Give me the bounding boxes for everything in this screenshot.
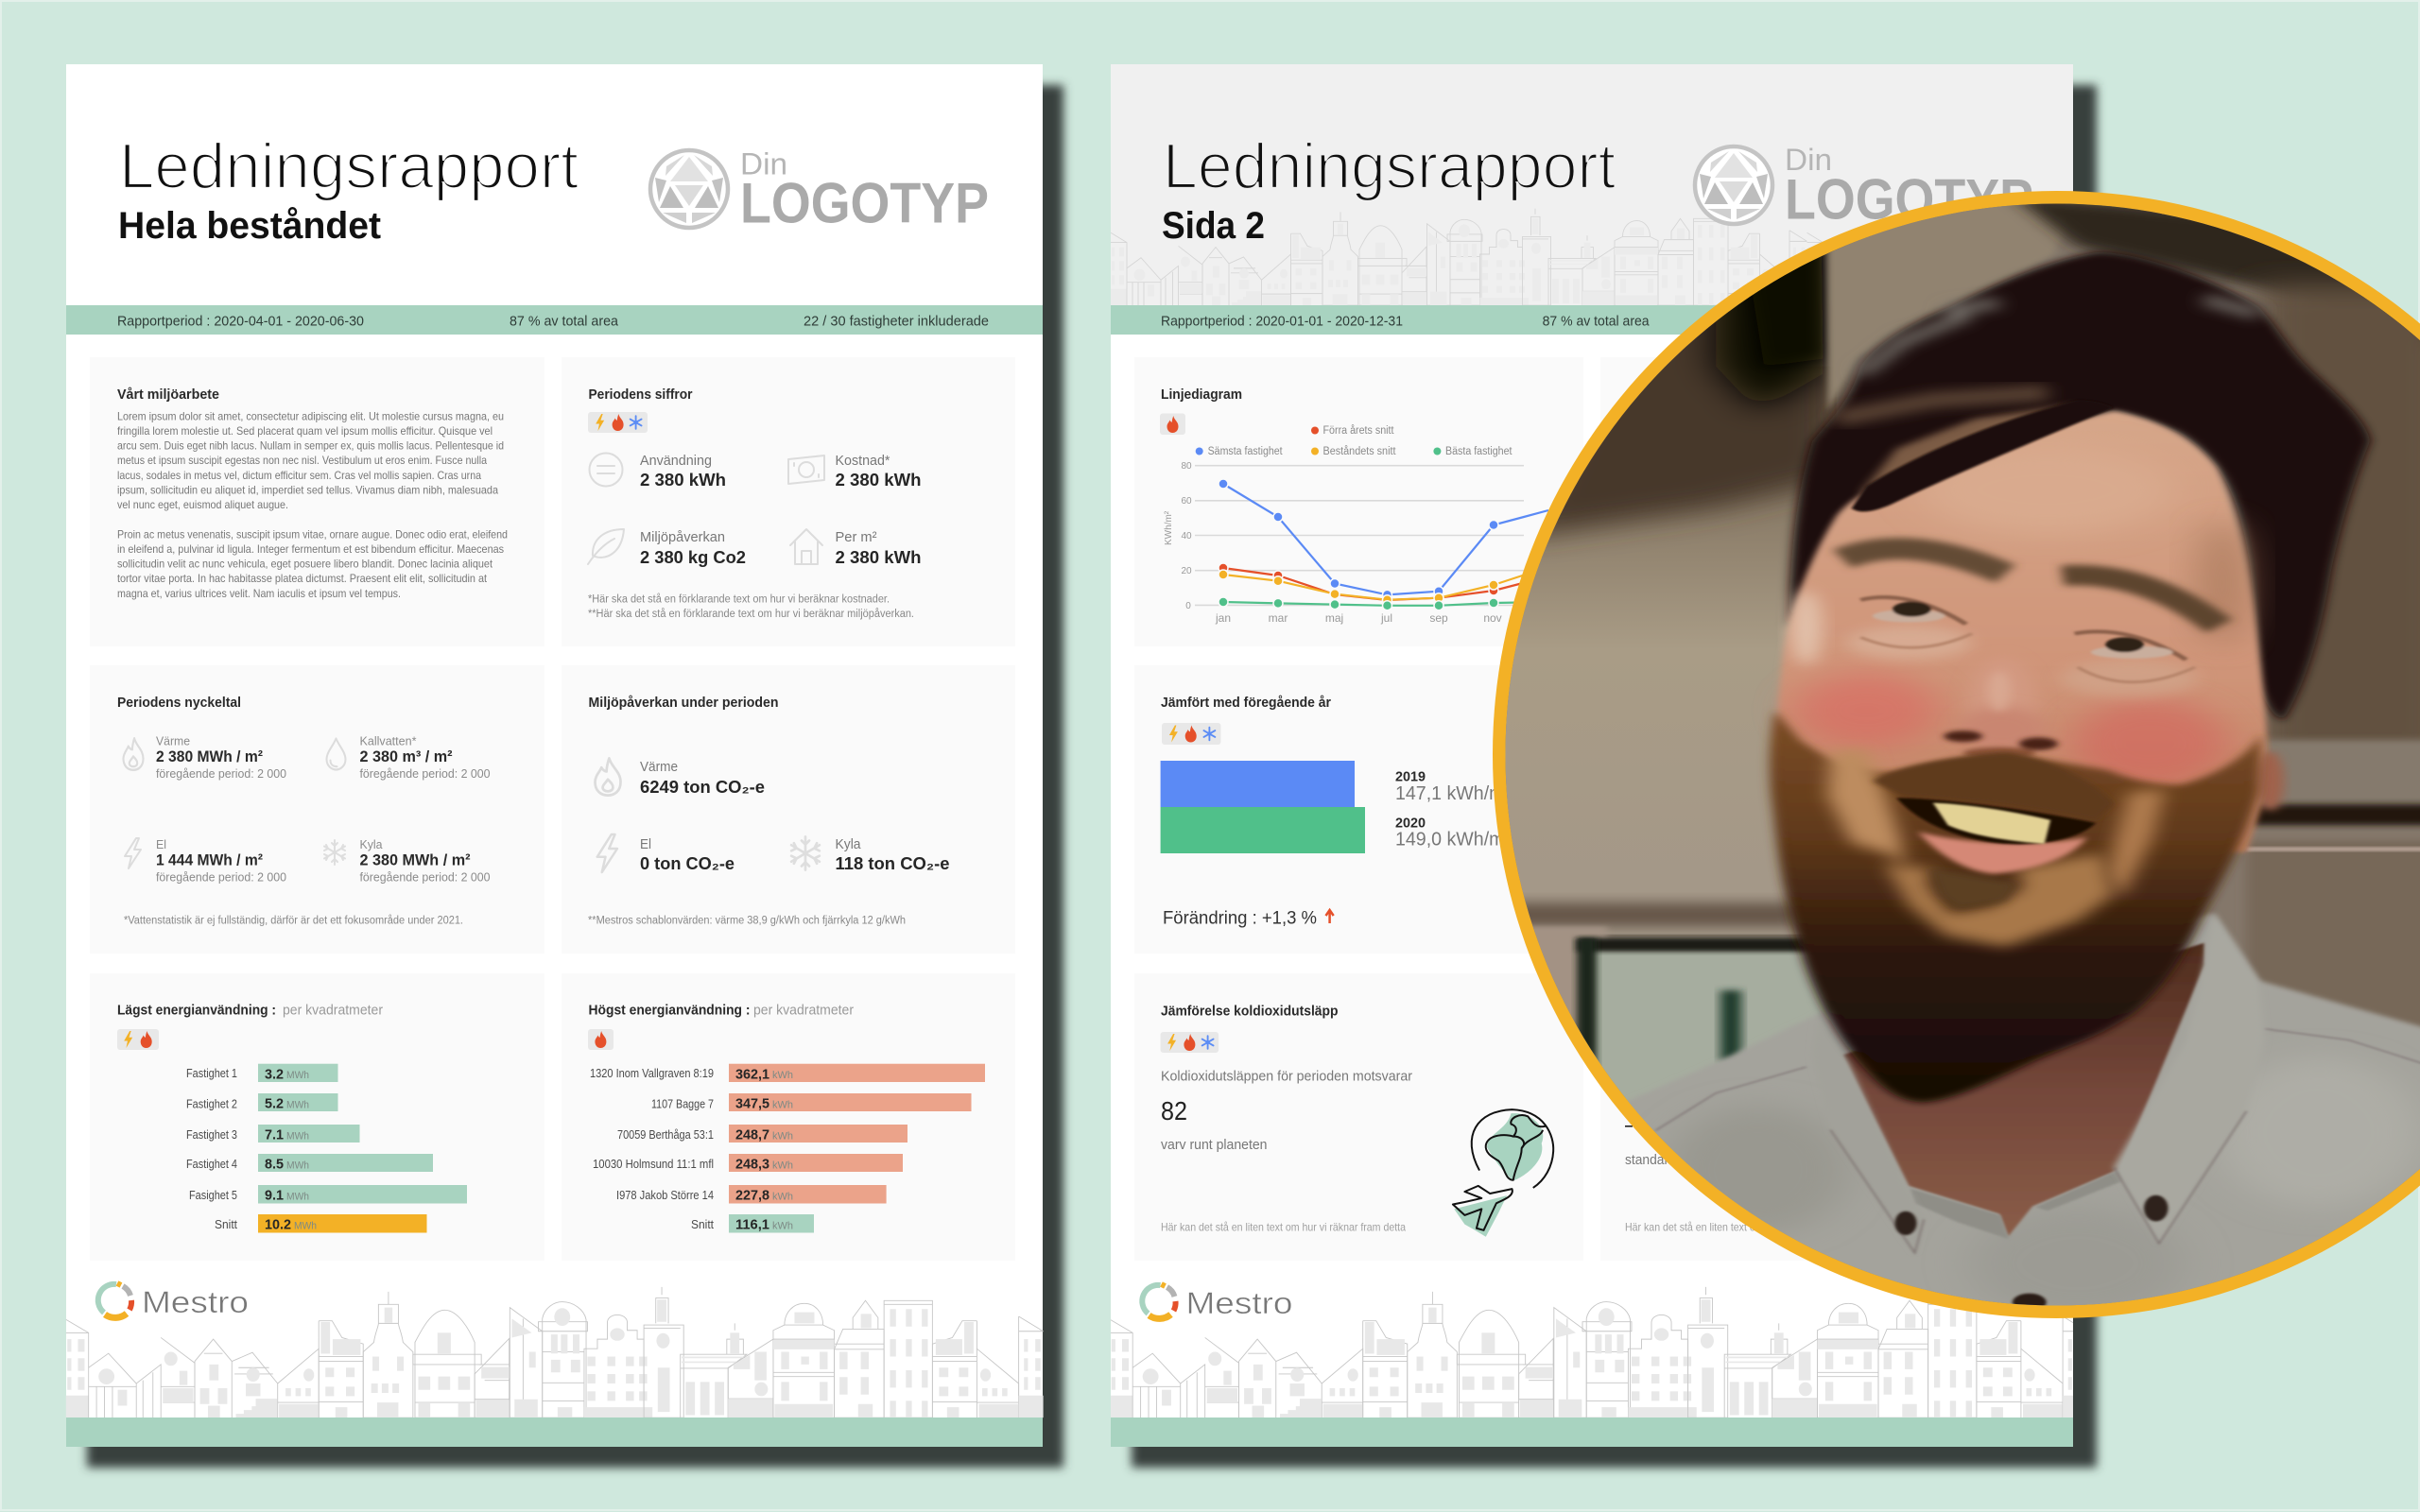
heading: Miljöpåverkan under perioden <box>588 696 779 711</box>
panel: Jämförelse koldioxidutsläpp <box>1134 973 2051 1261</box>
backdrop <box>1505 204 2420 1306</box>
Mestro logo: Mestro <box>1185 1286 1293 1320</box>
hidden panel text <box>1625 1125 1870 1234</box>
footnote: *Vattenstatistik är ej fullständig, därför är det ett fokusområde under 2021. <box>124 915 463 926</box>
line chart: 0 <box>1185 601 1191 611</box>
bar chart: lowest use: Fastighet 1 <box>186 1067 237 1080</box>
bar chart: highest use: kWh <box>772 1191 793 1202</box>
energy type chip <box>1160 414 1185 435</box>
metric: Kostnad: Kostnad* <box>836 453 890 469</box>
logo placeholder: LOGOTYP <box>1785 168 2033 231</box>
bar chart: lowest use: MWh <box>286 1070 309 1081</box>
metric: Kyla: Kyla <box>836 836 861 852</box>
chart legend: Förra årets snitt <box>1323 425 1394 437</box>
heading: Periodens nyckeltal <box>117 696 241 711</box>
panel: Periodens nyckeltal <box>90 665 544 954</box>
metric: Miljöpåverkan <box>588 529 746 567</box>
big number: 82 <box>1161 1096 1187 1125</box>
bar chart: lowest use: Fastighet 3 <box>186 1128 237 1142</box>
metric: El: El <box>640 836 651 852</box>
chart legend: Beståndets snitt <box>1323 446 1396 457</box>
bar chart: lowest use: MWh <box>286 1130 309 1142</box>
bar chart: lowest use: Fastighet 4 <box>186 1158 237 1171</box>
heading <box>117 1004 383 1019</box>
footnotes: *Här ska det stå en förklarande text om hur vi beräknar kostnader. <box>588 593 890 605</box>
bar chart: highest use: 227,8 <box>735 1187 769 1204</box>
hidden panel text: standardhus <box>1625 1152 1697 1168</box>
body text: in eleifend a, pulvinar id ligula. Integer fermentum et est bibendum efficitur. Maecenas <box>117 542 504 556</box>
metric: Värme: Värme <box>640 759 678 775</box>
energy type chip <box>588 412 648 433</box>
ear <box>2257 751 2284 811</box>
panel: Linjediagram <box>1134 357 2051 646</box>
chart legend <box>1196 425 1512 457</box>
metric: Kallvatten <box>327 734 490 781</box>
bar chart: lowest use: MWh <box>286 1191 309 1202</box>
body text: magna et, varius ultrices velit. Nam iaculis et ipsum vel tempus. <box>117 587 401 600</box>
bar chart: lowest use: Fasighet 5 <box>189 1189 237 1202</box>
info strip: 87 % av total area <box>510 314 619 329</box>
metric: Värme: Värme <box>156 734 190 748</box>
metric: Värme <box>123 734 286 781</box>
subtitle: Hela beståndet <box>118 205 381 247</box>
bar chart: highest use: 10030 Holmsund 11:1 mfl <box>593 1158 714 1171</box>
metric: Värme <box>596 758 765 797</box>
info strip <box>66 305 1043 335</box>
line chart: 60 <box>1181 496 1192 507</box>
metric: Användning <box>590 453 726 490</box>
bar chart: lowest use: 5.2 <box>265 1096 284 1111</box>
line chart: jul <box>1380 611 1392 625</box>
bar chart: highest use: 248,3 <box>735 1157 769 1172</box>
info strip: Rapportperiod : 2020-04-01 - 2020-06-30 <box>117 314 364 329</box>
comparison bars: 147,1 kWh/m² <box>1395 783 1511 804</box>
heading: Jämförelse koldioxidutsläpp <box>1161 1005 1339 1020</box>
logo placeholder: LOGOTYP <box>740 172 989 234</box>
metric: Kyla: 118 ton CO₂-e <box>836 853 949 873</box>
comparison bars: 2020 <box>1395 816 1426 832</box>
wall band and window <box>1499 902 1800 927</box>
metric: Miljöpåverkan: 2 380 kg Co2 <box>640 547 746 567</box>
line chart: mar <box>1269 611 1288 625</box>
info strip: Rapportperiod : 2020-01-01 - 2020-12-31 <box>1161 314 1403 329</box>
panel: Lägst energianvändning <box>90 973 544 1261</box>
body text: sollicitudin velit ac nunc vehicula, eget posuere libero blandit. Donec lacinia aliquet <box>117 558 493 571</box>
energy type chip <box>1162 723 1221 745</box>
bar chart: lowest use: Fastighet 2 <box>186 1098 237 1111</box>
bar chart: highest use: kWh <box>772 1221 793 1232</box>
info strip: 22 / 30 fastigheter inkluderade <box>804 314 989 329</box>
bar chart: highest use: 1107 Bagge 7 <box>651 1098 714 1111</box>
bar chart: highest use: kWh <box>772 1100 793 1111</box>
collars <box>1812 913 2265 1312</box>
bar chart: highest use: kWh <box>772 1130 793 1142</box>
small note: Här kan det stå en liten text om hur vi räknar fram detta <box>1161 1221 1406 1234</box>
beard <box>1770 710 2261 1103</box>
text block: Koldioxidutsläppen för perioden motsvarar <box>1161 1069 1412 1085</box>
Mestro logo: Mestro <box>142 1285 249 1319</box>
hair front <box>1837 300 2258 511</box>
metric: Kyla: 2 380 MWh / m² <box>359 852 471 869</box>
metric: Kyla <box>324 837 490 885</box>
metric: Kyla: föregående period: 2 000 <box>359 870 490 885</box>
footnote: **Mestros schablonvärden: värme 38,9 g/kWh och fjärrkyla 12 g/kWh <box>588 915 906 926</box>
line chart: 40 <box>1181 531 1192 541</box>
metric: El: 1 444 MWh / m² <box>156 852 263 869</box>
metric: Per m²: Per m² <box>836 529 877 545</box>
comparison bars: 149,0 kWh/m² <box>1395 830 1511 850</box>
title: Ledningsrapport <box>1163 130 1616 202</box>
line chart <box>1164 461 1548 625</box>
footer band <box>1111 1418 2073 1447</box>
energy type chip <box>1161 1032 1219 1053</box>
metric: Per m²: 2 380 kWh <box>836 547 921 567</box>
bar chart: lowest use: MWh <box>286 1160 309 1172</box>
face <box>1778 411 2267 852</box>
metric: Per m² <box>790 529 921 567</box>
metric: Kyla: Kyla <box>359 837 383 851</box>
Mestro logo <box>98 1283 249 1319</box>
shirt <box>1628 912 2420 1306</box>
skyline illustration <box>1110 1287 2087 1418</box>
bar chart: lowest use: 8.5 <box>265 1157 284 1172</box>
metric: El <box>125 837 286 885</box>
metric: Användning: Användning <box>640 453 712 469</box>
metric: Kostnad <box>788 453 921 490</box>
bar chart: highest use: kWh <box>772 1070 793 1081</box>
logo placeholder <box>650 147 989 234</box>
bar chart: highest use: kWh <box>772 1160 793 1172</box>
hidden panel text: Här kan det stå en liten text om hur vi räknar fram detta <box>1625 1221 1870 1234</box>
line chart: maj <box>1325 611 1343 625</box>
line chart: 20 <box>1181 566 1192 576</box>
metric: Värme: 6249 ton CO₂-e <box>640 777 765 797</box>
icon: globe and plane <box>1453 1109 1553 1237</box>
body text: vel nunc eget, euismod aliquet augue. <box>117 498 288 511</box>
metric: Värme: föregående period: 2 000 <box>156 766 286 781</box>
skyline illustration <box>66 1287 1044 1418</box>
metric: Kostnad: 2 380 kWh <box>836 470 921 490</box>
bar chart: highest use: 116,1 <box>735 1217 769 1232</box>
bar chart: lowest use: 9.1 <box>265 1187 284 1204</box>
metric: El: 0 ton CO₂-e <box>640 853 735 873</box>
page 2: Sida 2 <box>1111 64 2104 1476</box>
metric: Miljöpåverkan: Miljöpåverkan <box>640 529 725 545</box>
body text: lacus, sodales in metus vel, dictum efficitur sem. Cras vel mollis sapien. Cras urna <box>117 469 481 482</box>
body text: ipsum, sollicitudin eu aliquet id, imperdiet sed tellus. Vivamus diam nibh, malesuada <box>117 483 498 496</box>
heading <box>588 1004 854 1019</box>
info strip <box>1111 305 2073 335</box>
header skyline <box>1111 208 1823 305</box>
metric: Kyla <box>791 836 949 873</box>
comparison bars <box>1161 761 1511 853</box>
body text: Lorem ipsum dolor sit amet, consectetur adipiscing elit. Ut molestie cursus magna, eu <box>117 410 504 423</box>
metric: Kallvatten: Kallvatten* <box>359 734 416 748</box>
moustache and mouth <box>1873 753 2114 874</box>
footnotes: **Här ska det stå en förklarande text om hur vi beräknar miljöpåverkan. <box>588 609 914 620</box>
bar chart: lowest use: MWh <box>294 1221 317 1232</box>
body text: arcu sem. Duis eget nibh lacus. Nullam in semper ex, quis mollis lacus. Pellentesque id <box>117 439 504 453</box>
body text: tortor vitae porta. In hac habitasse platea dictumst. Praesent elit elit, sollicitudin at <box>117 572 488 585</box>
metric: El <box>597 834 735 873</box>
line chart: KWh/m² <box>1164 510 1174 545</box>
chart legend: Sämsta fastighet <box>1208 446 1283 457</box>
metric: El: El <box>156 837 166 851</box>
metric: Kallvatten: 2 380 m³ / m² <box>359 748 453 765</box>
panel: Miljöpåverkan under perioden <box>562 665 1015 954</box>
bar chart: lowest use <box>186 1064 467 1232</box>
bar chart: lowest use: MWh <box>286 1100 309 1111</box>
body text: fringilla lorem molestie ut. Sed placerat quam vel ipsum mollis efficitur. Quisque vel <box>117 424 493 438</box>
hair back <box>1789 252 2370 721</box>
logo placeholder: Din <box>740 147 787 181</box>
comparison bars: 2019 <box>1395 769 1426 784</box>
footer band <box>66 1418 1043 1447</box>
heading: per kvadratmeter <box>753 1004 854 1019</box>
portrait photo in circle <box>1450 180 2420 1375</box>
heading: Linjediagram <box>1161 387 1242 403</box>
bar chart: highest use <box>590 1064 985 1232</box>
panel: Högst energianvändning <box>562 973 1015 1261</box>
page 1: Hela beståndet <box>66 64 1063 1468</box>
body text: Proin ac metus venenatis, suscipit ipsum vitae, ornare augue. Donec odio erat, eleifend <box>117 527 508 541</box>
metric: El: föregående period: 2 000 <box>156 870 286 885</box>
bar chart: lowest use: Snitt <box>215 1218 238 1231</box>
footnotes <box>588 593 914 620</box>
metric: Värme: 2 380 MWh / m² <box>156 748 263 765</box>
body text: metus et ipsum suscipit egestas non nec nisl. Vestibulum ut eros enim. Fusce nulla <box>117 454 487 467</box>
bar chart: highest use: 70059 Berthåga 53:1 <box>617 1128 714 1142</box>
bar chart: highest use: 347,5 <box>735 1096 769 1111</box>
metric: Kallvatten: föregående period: 2 000 <box>359 766 490 781</box>
heading: Jämfört med föregående år <box>1161 696 1331 711</box>
bar chart: highest use: 248,7 <box>735 1126 769 1143</box>
logo placeholder <box>1695 143 2033 231</box>
info strip: 87 % av total area <box>1543 314 1650 329</box>
chart legend: Bästa fastighet <box>1445 446 1512 457</box>
eyes <box>1860 597 2195 682</box>
body text <box>117 410 508 600</box>
neck <box>1842 943 2204 1236</box>
eyebrows <box>1842 549 2220 627</box>
metric: Användning: 2 380 kWh <box>640 470 726 490</box>
panel: Periodens siffror <box>562 357 1015 646</box>
change summary: Förändring : +1,3 % <box>1163 907 1317 928</box>
line chart: jan <box>1215 611 1231 625</box>
caption: varv runt planeten <box>1161 1137 1267 1153</box>
heading: per kvadratmeter <box>283 1004 383 1019</box>
bar chart: highest use: 1320 Inom Vallgraven 8:19 <box>590 1067 714 1080</box>
bar chart: lowest use: 7.1 <box>265 1126 284 1143</box>
panel: Jämfört med föregående år <box>1134 665 2051 954</box>
bar chart: highest use: Snitt <box>691 1218 715 1231</box>
subtitle: Sida 2 <box>1162 205 1265 247</box>
heading: Högst energianvändning : <box>588 1004 751 1019</box>
bar chart: highest use: I978 Jakob Större 14 <box>616 1189 714 1202</box>
bar chart: lowest use: 3.2 <box>265 1066 284 1083</box>
line chart: nov <box>1483 611 1502 625</box>
heading: Lägst energianvändning : <box>117 1004 276 1019</box>
energy type chip <box>117 1029 159 1050</box>
nose <box>1944 730 2058 759</box>
line chart: 80 <box>1181 461 1192 472</box>
heading: Periodens siffror <box>588 387 693 403</box>
bar chart: lowest use: 10.2 <box>265 1217 291 1232</box>
heading: Vårt miljöarbete <box>117 387 219 403</box>
bar chart: highest use: 362,1 <box>735 1066 769 1083</box>
energy type chip <box>588 1029 614 1050</box>
Mestro logo <box>1142 1284 1293 1320</box>
line chart: sep <box>1429 611 1448 625</box>
panel: Vårt miljöarbete <box>90 357 544 646</box>
logo placeholder: Din <box>1785 143 1832 177</box>
title: Ledningsrapport <box>119 130 579 202</box>
